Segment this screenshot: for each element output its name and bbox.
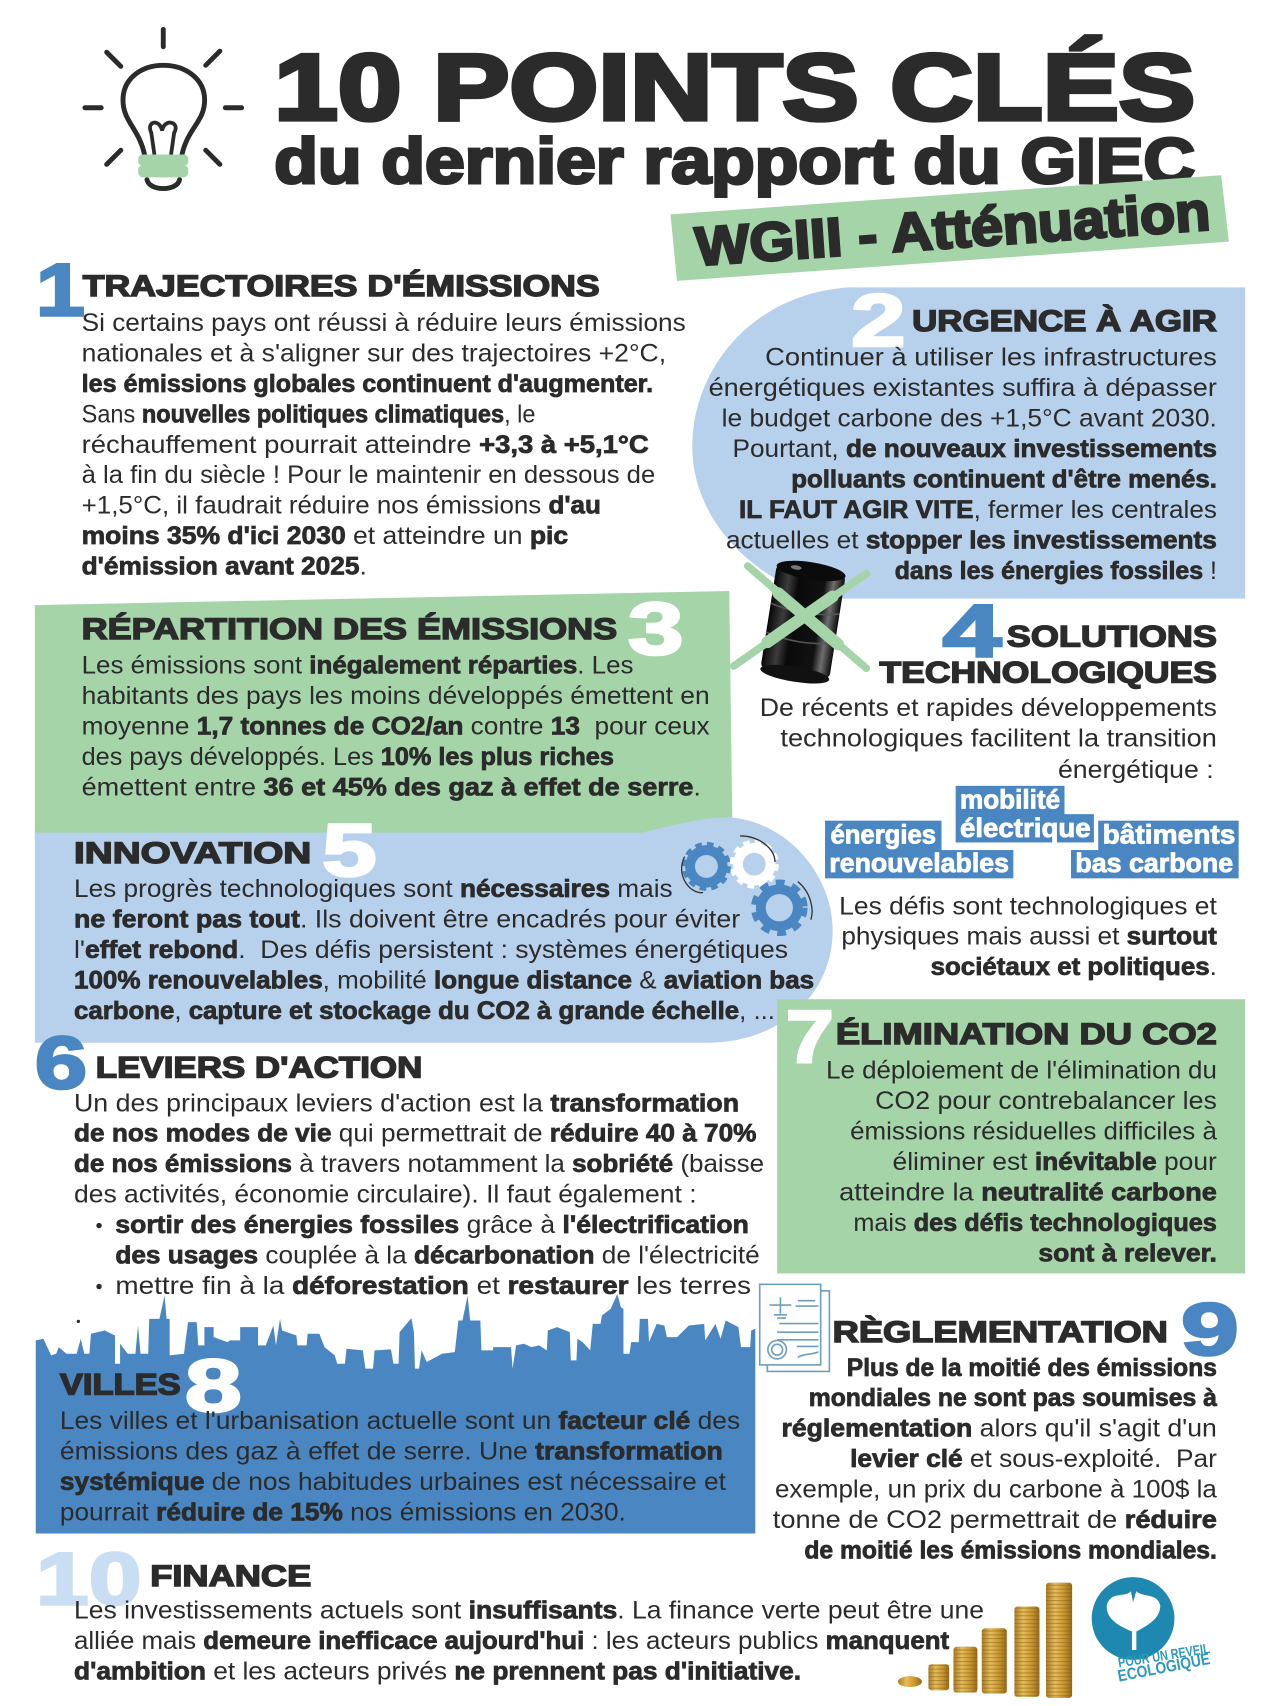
text block 5: 100% renouvelables , mobilité longue distance & aviation bas: [74, 966, 814, 994]
panel 2: urgence à agir: [692, 279, 1245, 599]
text block 4 conclusion: physiques mais aussi et surtout: [841, 923, 1218, 951]
heading 10: FINANCE: [150, 1560, 311, 1593]
icon: crossed oil barrel: [734, 557, 866, 687]
text block 3: des pays développés. Les 10% les plus riches: [82, 743, 614, 771]
tag: mobilité électrique: électrique: [960, 812, 1091, 843]
subtitle: du dernier rapport du GIEC: [274, 125, 1195, 197]
panel 9: règlementation: [760, 1284, 1239, 1565]
text block 6: des usages couplée à la décarbonation de l'électricité: [115, 1242, 760, 1270]
panel 5: innovation: [35, 809, 833, 1043]
skyline: [36, 1294, 755, 1533]
text block 2: dans les énergies fossiles !: [895, 557, 1217, 585]
panel 1: trajectoires d'émissions: [36, 249, 686, 581]
text block 2: IL FAUT AGIR VITE , fermer les centrales: [739, 496, 1217, 524]
text block 1: à la fin du siècle ! Pour le maintenir en dessous de: [82, 461, 655, 489]
heading 7: ÉLIMINATION DU CO2: [836, 1017, 1217, 1051]
heading 8: VILLES: [60, 1368, 181, 1401]
number 3: 3: [628, 587, 684, 670]
text block 7: éliminer est inévitable pour: [893, 1148, 1217, 1176]
tag: bâtiments bas carbone: [1071, 819, 1239, 878]
text block 2: énergétiques existantes suffira à dépasser: [709, 374, 1217, 402]
number 1: 1: [36, 249, 85, 332]
text block 9: réglementation alors qu'il s'agit d'un: [781, 1415, 1217, 1443]
text block 6: de nos émissions à travers notamment la sobriété (baisse: [74, 1150, 764, 1178]
heading 3: RÉPARTITION DES ÉMISSIONS: [82, 612, 617, 646]
text block 1: les émissions globales continuent d'augmenter.: [82, 370, 653, 398]
text block 6: [74, 1089, 764, 1323]
text block 10: d'ambition et les acteurs privés ne prennent pas d'initiative.: [74, 1657, 801, 1685]
panel 4: solutions technologiques: [734, 557, 1239, 981]
panel 8: villes: [36, 1294, 755, 1533]
heading 5: INNOVATION: [74, 837, 311, 870]
text block 1: moins 35% d'ici 2030 et atteindre un pic: [82, 522, 568, 550]
title: 10 POINTS CLÉS: [274, 35, 1195, 140]
number 8: 8: [185, 1345, 242, 1428]
number 7: 7: [786, 995, 834, 1078]
text block 3: émettent entre 36 et 45% des gaz à effet de serre .: [82, 774, 701, 802]
text block 6: de nos modes de vie qui permettrait de réduire 40 à 70%: [74, 1120, 756, 1148]
text block 1: Si certains pays ont réussi à réduire leurs émissions: [82, 309, 686, 337]
text block 2: Continuer à utiliser les infrastructures: [765, 344, 1217, 372]
text block 5: Les progrès technologiques sont nécessaires mais: [74, 875, 673, 903]
text block 9: mondiales ne sont pas soumises à: [809, 1384, 1217, 1412]
text block 6: Un des principaux leviers d'action est la transformation: [74, 1089, 739, 1117]
text block 3: [82, 652, 710, 802]
heading 1: TRAJECTOIRES D'ÉMISSIONS: [83, 269, 600, 303]
number 6: 6: [35, 1021, 87, 1104]
text block 2: Pourtant, de nouveaux investissements: [733, 435, 1217, 463]
text block 8: systémique de nos habitudes urbaines est nécessaire et: [60, 1468, 726, 1496]
text block 10: [74, 1596, 984, 1685]
text block 8: [60, 1407, 740, 1527]
text block 7: [826, 1057, 1217, 1267]
tag: bâtiments bas carbone: bâtiments: [1103, 819, 1235, 850]
number 9: 9: [1181, 1288, 1239, 1371]
text block 3: habitants des pays les moins développés émettent en: [82, 682, 710, 710]
text block 5: carbone, capture et stockage du CO2 à grande échelle , ...: [74, 997, 775, 1025]
text block 2: le budget carbone des +1,5°C avant 2030.: [722, 405, 1217, 433]
heading 4: SOLUTIONS: [1007, 621, 1217, 654]
text block 9: de moitié les émissions mondiales.: [804, 1537, 1217, 1565]
text block 4 intro: [760, 694, 1217, 784]
panel 6: leviers d'action: [35, 1021, 764, 1323]
tag: bâtiments bas carbone: bas carbone: [1075, 847, 1233, 878]
text block 3: Les émissions sont inégalement réparties . Les: [82, 652, 633, 680]
icon: coin stacks: [898, 1583, 1072, 1698]
tag: énergies renouvelables: énergies: [830, 819, 936, 850]
logo: Pour un réveil écologique: ECOLOGIQUE: [1116, 1650, 1212, 1686]
text block 9: tonne de CO2 permettrait de réduire: [773, 1506, 1217, 1534]
text block 4 conclusion: [839, 892, 1218, 981]
icon: light bulb: [85, 29, 242, 189]
text block 4 conclusion: sociétaux et politiques .: [931, 953, 1217, 981]
text block 7: Le déploiement de l'élimination du: [826, 1057, 1217, 1085]
text block 1: +1,5°C, il faudrait réduire nos émissions d'au: [82, 492, 601, 520]
text block 4 intro: technologiques facilitent la transition: [780, 725, 1217, 753]
text block 2: polluants continuent d'être menés.: [791, 466, 1217, 494]
text block 4 intro: énergétique :: [1058, 756, 1214, 784]
heading 6: LEVIERS D'ACTION: [96, 1052, 422, 1085]
text block 8: Les villes et l'urbanisation actuelle sont un facteur clé des: [60, 1407, 740, 1435]
text block 4 intro: De récents et rapides développements: [760, 694, 1217, 722]
icon: regulation document: [760, 1284, 829, 1371]
panel 10: finance: [36, 1537, 1212, 1698]
tag: énergies renouvelables: [825, 819, 1013, 878]
tag: énergies renouvelables: renouvelables: [829, 847, 1009, 878]
text block 7: émissions résiduelles difficiles à: [850, 1118, 1217, 1146]
text block 6: mettre fin à la déforestation et restaurer les terres: [115, 1272, 751, 1300]
text block 9: [773, 1354, 1217, 1565]
text block 10: alliée mais demeure inefficace aujourd'hui : les acteurs publics manquent: [74, 1627, 950, 1655]
heading 4: TECHNOLOGIQUES: [879, 656, 1217, 689]
panel 7: élimination du CO2: [777, 995, 1245, 1273]
text block 7: CO2 pour contrebalancer les: [875, 1087, 1217, 1115]
text block 2: [709, 344, 1217, 585]
text block 1: nationales et à s'aligner sur des trajectoires +2°C,: [82, 339, 666, 367]
number 10: 10: [36, 1537, 141, 1620]
text block 5: l'effet rebond . Des défis persistent : systèmes énergétiques: [74, 936, 788, 964]
tag: WGIII Atténuation: WGIII - Atténuation: [693, 181, 1212, 278]
logo: Pour un réveil écologique: [1092, 1577, 1212, 1686]
text block 8: émissions des gaz à effet de serre. Une transformation: [60, 1438, 723, 1466]
text block 9: levier clé et sous-exploité. Par: [850, 1445, 1217, 1473]
text block 7: mais des défis technologiques: [853, 1209, 1217, 1237]
tag: mobilité électrique: [956, 784, 1094, 843]
heading 4: [879, 621, 1217, 689]
tag: mobilité électrique: mobilité: [960, 784, 1060, 815]
text block 9: exemple, un prix du carbone à 100$ la: [775, 1476, 1217, 1504]
text block 1: [82, 309, 686, 581]
text block 10: Les investissements actuels sont insuffisants . La finance verte peut être une: [74, 1596, 984, 1624]
text block 1: réchauffement pourrait atteindre +3,3 à +5,1°C: [82, 431, 649, 459]
panel 3: répartition des émissions: [35, 587, 733, 838]
text block 9: Plus de la moitié des émissions: [847, 1354, 1217, 1382]
text block 2: actuelles et stopper les investissements: [726, 527, 1217, 555]
logo: Pour un réveil écologique: POUR UN REVEIL: [1117, 1640, 1211, 1670]
text block 6: sortir des énergies fossiles grâce à l'électrification: [115, 1211, 749, 1239]
text block 1: Sans nouvelles politiques climatiques, le: [82, 400, 536, 428]
text block 7: sont à relever.: [1038, 1239, 1217, 1267]
text block 1: d'émission avant 2025 .: [82, 553, 367, 581]
heading 9: RÈGLEMENTATION: [833, 1315, 1168, 1349]
number 4: 4: [943, 589, 1001, 672]
number 5: 5: [322, 809, 377, 892]
number 2: 2: [851, 279, 906, 362]
text block 4 conclusion: Les défis sont technologiques et: [839, 892, 1217, 920]
text block 3: moyenne 1,7 tonnes de CO2/an contre 13 pour ceux: [82, 713, 710, 741]
text block 5: [74, 875, 814, 1025]
text block 7: atteindre la neutralité carbone: [839, 1179, 1217, 1207]
icon: gears: [682, 836, 812, 933]
heading 2: URGENCE À AGIR: [912, 304, 1217, 338]
text block 8: pourrait réduire de 15% nos émissions en 2030.: [60, 1499, 626, 1527]
text block 5: ne feront pas tout . Ils doivent être encadrés pour éviter: [74, 905, 740, 933]
text block 6: des activités, économie circulaire). Il faut également :: [74, 1181, 697, 1209]
